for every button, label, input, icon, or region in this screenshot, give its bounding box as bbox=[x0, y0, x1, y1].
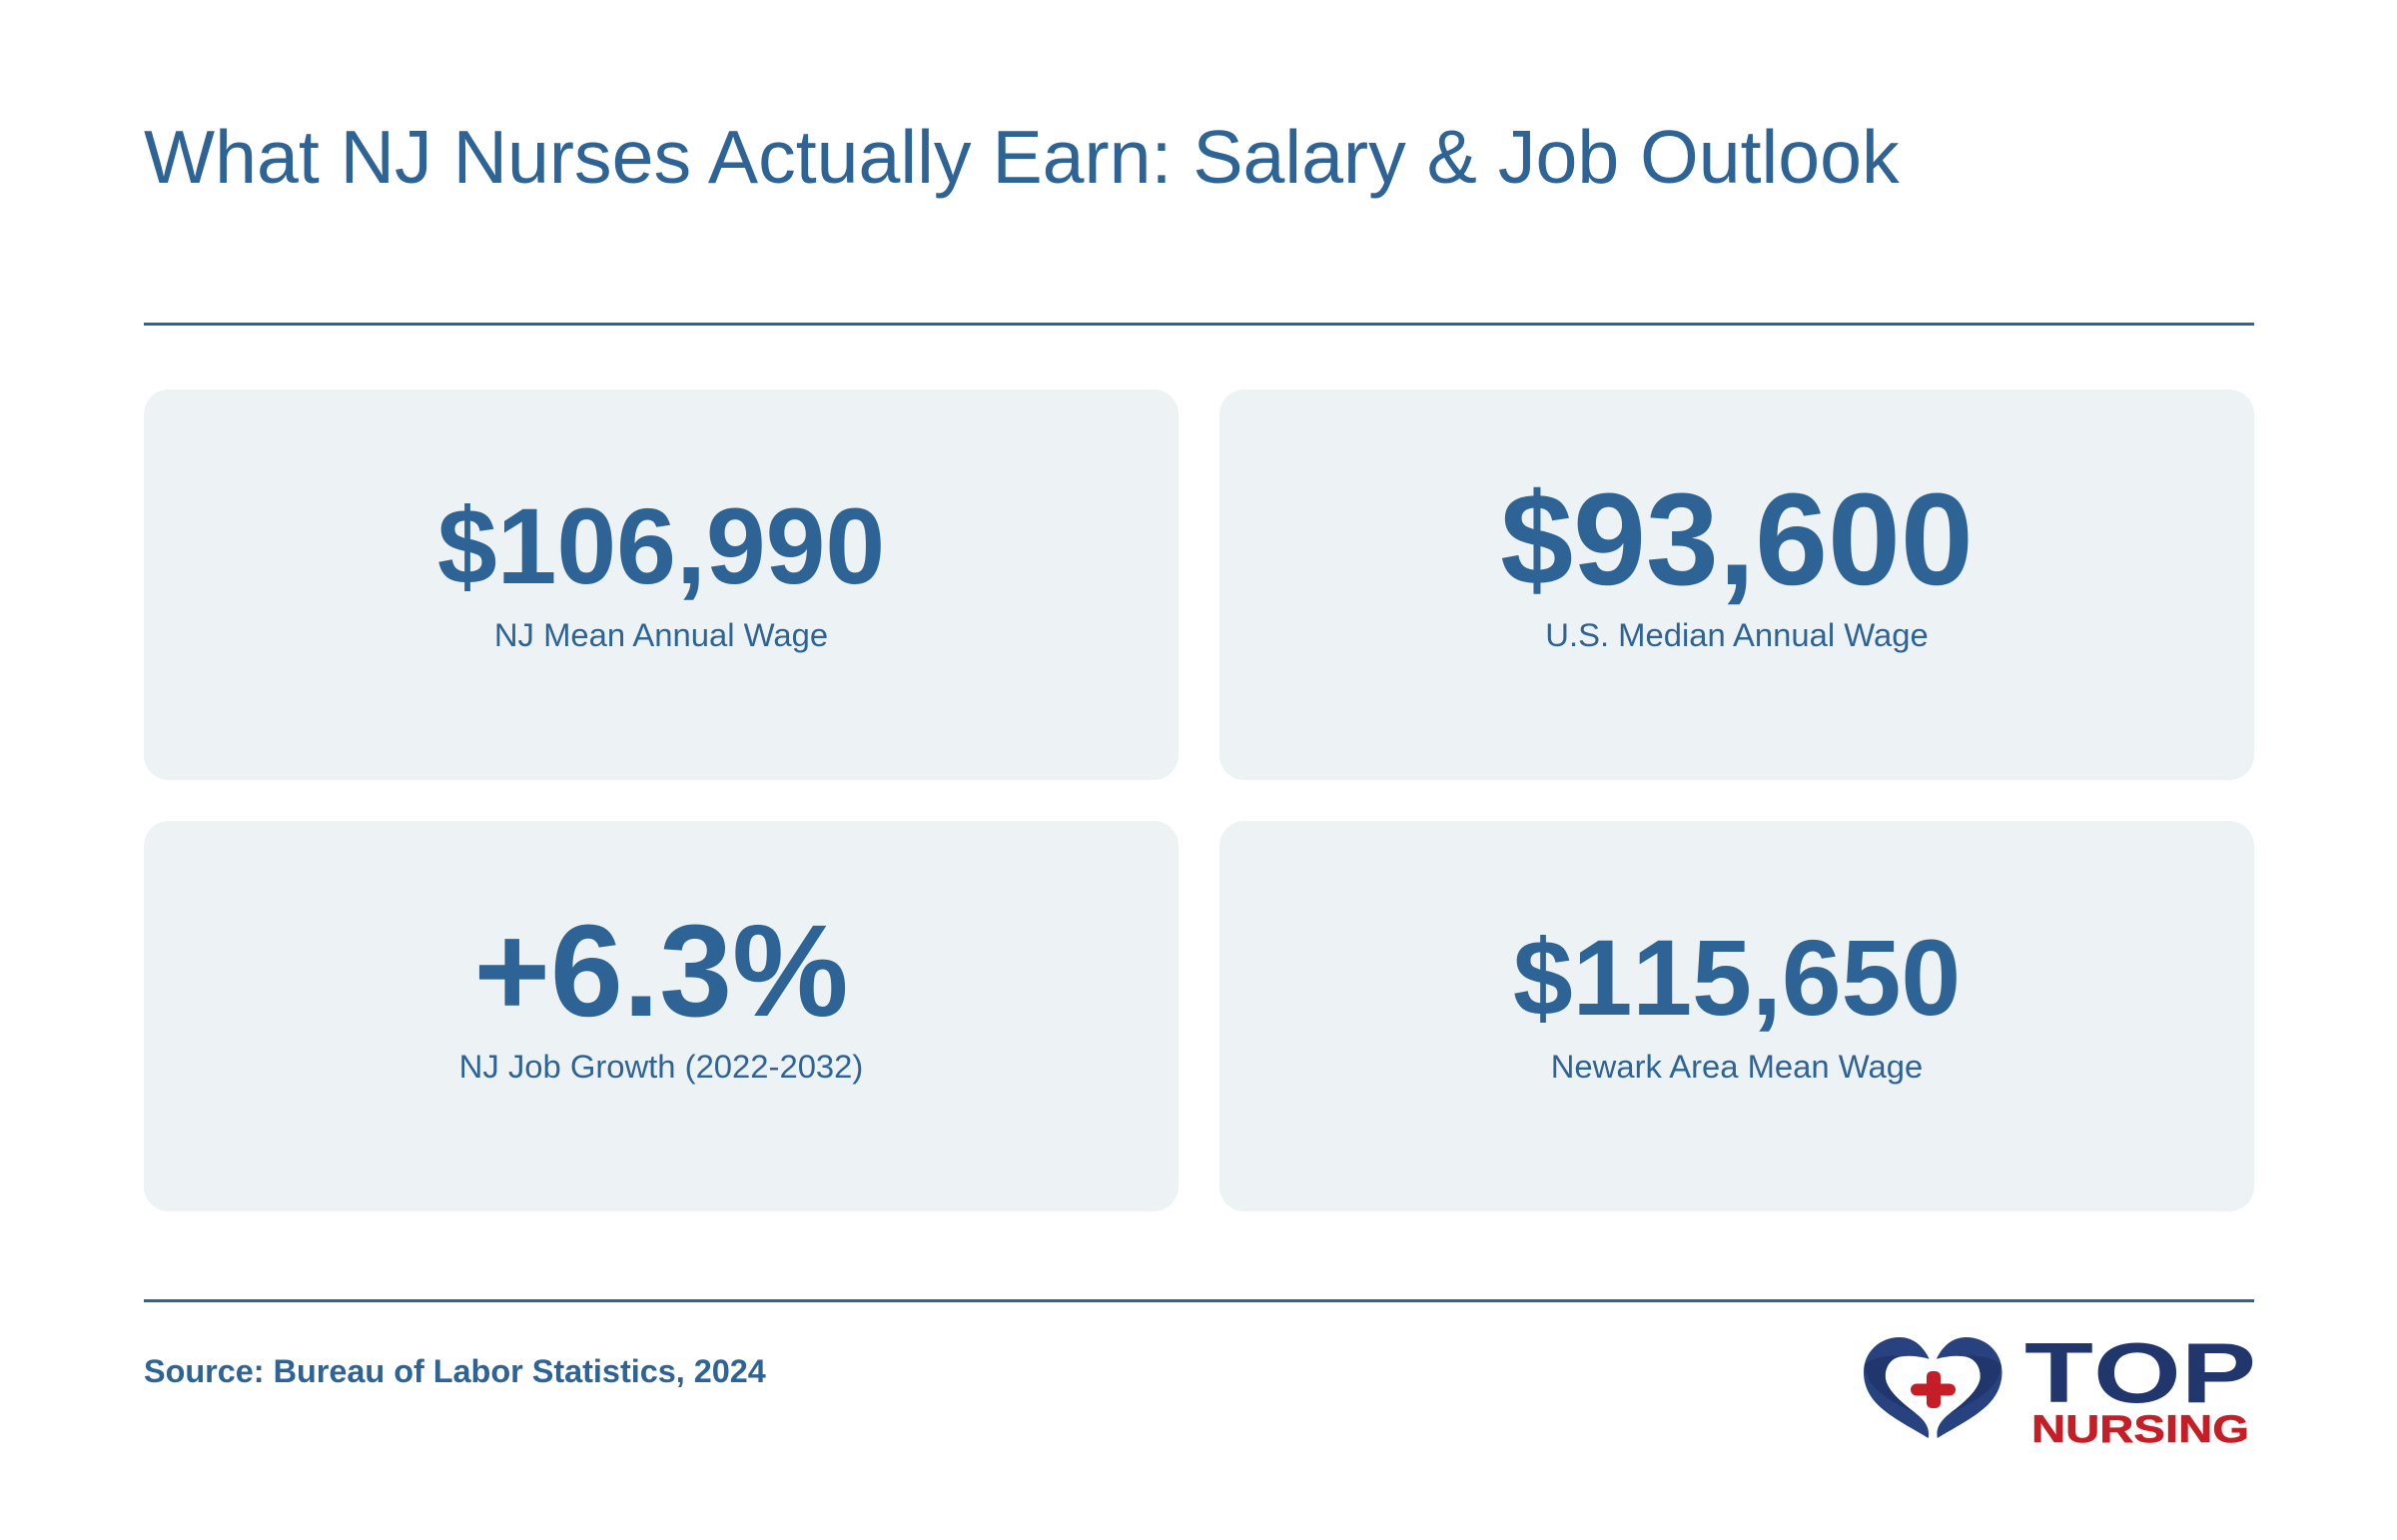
source note: Source: Bureau of Labor Statistics, 2024 bbox=[144, 1353, 766, 1389]
stat value: $93,600 bbox=[1500, 465, 1974, 612]
icon: heart with cross bbox=[1864, 1337, 2001, 1438]
stat value: $106,990 bbox=[437, 486, 885, 606]
title: What NJ Nurses Actually Earn: Salary & Job Outlook bbox=[144, 115, 1900, 199]
stat label: U.S. Median Annual Wage bbox=[1545, 616, 1929, 653]
panel: NJ job growth bbox=[144, 821, 1179, 1211]
logo wordmark: TOP: TOP bbox=[2024, 1326, 2256, 1421]
panel: NJ mean annual wage bbox=[144, 389, 1179, 780]
logo wordmark: NURSING: NURSING bbox=[2031, 1408, 2249, 1451]
panel: U.S. median annual wage bbox=[1219, 389, 2254, 780]
logo: Top Nursing bbox=[1864, 1326, 2256, 1451]
stat label: NJ Job Growth (2022-2032) bbox=[459, 1048, 863, 1085]
stat label: NJ Mean Annual Wage bbox=[494, 616, 828, 653]
stat value: $115,650 bbox=[1513, 918, 1961, 1038]
stat label: Newark Area Mean Wage bbox=[1551, 1048, 1923, 1085]
panel: Newark area mean wage bbox=[1219, 821, 2254, 1211]
stat value: +6.3% bbox=[473, 897, 849, 1044]
